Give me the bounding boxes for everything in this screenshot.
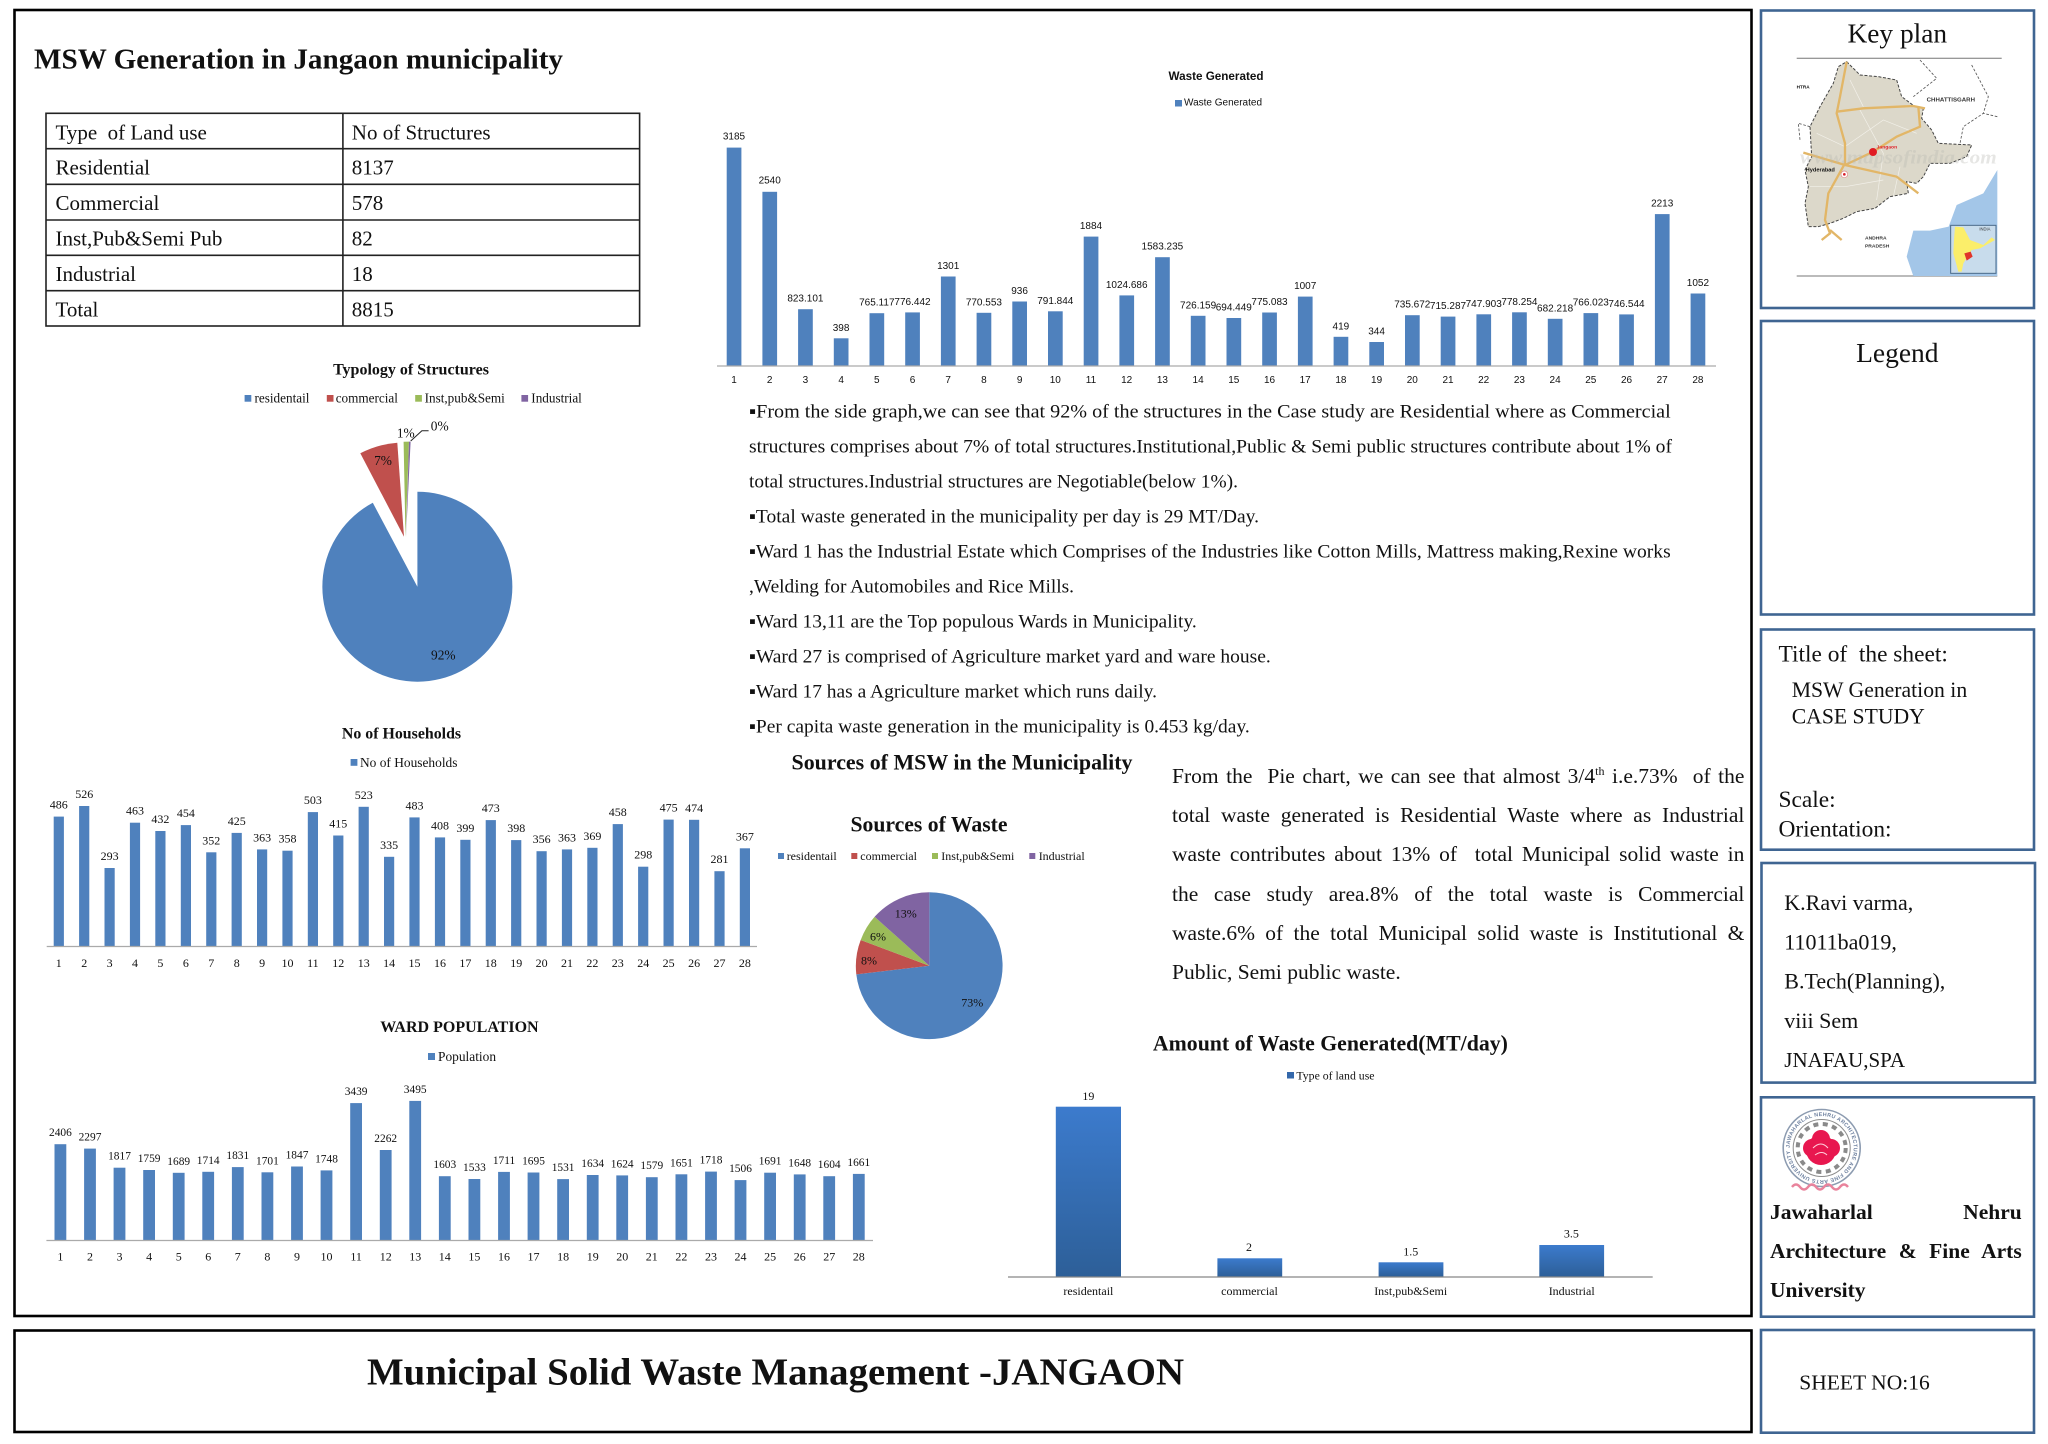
value labels: 1.5	[1403, 1244, 1418, 1258]
legend: commercial	[860, 849, 918, 863]
table: structures by land use: Residential	[56, 156, 150, 180]
panel: title of the sheet: CASE STUDY	[1792, 704, 1925, 728]
text block: university name: University	[1770, 1278, 1866, 1302]
ward axis labels: 21	[646, 1250, 658, 1264]
value labels: 475	[660, 801, 678, 815]
page heading: MSW Generation in Jangaon municipality	[34, 43, 563, 75]
ward axis labels: 8	[981, 375, 987, 386]
ward axis labels: 2	[81, 956, 87, 970]
ward axis labels: 25	[663, 956, 675, 970]
legend: Inst,pub&Semi	[941, 849, 1015, 863]
panel: student details: K.Ravi varma,	[1784, 890, 1913, 915]
ward axis labels: 8	[264, 1250, 270, 1264]
ward axis labels: 27	[1657, 375, 1668, 386]
value labels: 369	[583, 829, 601, 843]
value labels: 770.553	[966, 297, 1002, 308]
chart title: Typology of Structures	[333, 361, 489, 378]
ward axis labels: 28	[739, 956, 751, 970]
value labels: 1711	[493, 1155, 515, 1167]
value labels: 778.254	[1501, 297, 1538, 308]
panel: legend	[1761, 321, 2034, 614]
slice labels: 0%	[431, 419, 449, 434]
ward axis labels: 23	[612, 956, 624, 970]
value labels: 1603	[433, 1159, 456, 1171]
value labels: 1007	[1294, 281, 1317, 292]
value labels: 747.903	[1466, 299, 1502, 310]
ward axis labels: 27	[823, 1250, 835, 1264]
ward axis labels: 16	[1264, 375, 1275, 386]
text block: key findings: ▪Per capita waste generation in the municipality is 0.453 kg/day.	[749, 716, 1250, 737]
value labels: 1701	[256, 1155, 279, 1167]
ward axis labels: 5	[874, 375, 880, 386]
text block: key findings: ,Welding for Automobiles and Rice Mills.	[749, 576, 1074, 597]
ward axis labels: 13	[358, 956, 370, 970]
value labels: 1583.235	[1142, 242, 1184, 253]
value labels: 352	[202, 833, 220, 847]
value labels: 486	[50, 798, 68, 812]
ward axis labels: 14	[439, 1250, 451, 1264]
value labels: 936	[1011, 286, 1028, 297]
value labels: 367	[736, 829, 754, 843]
table: structures by land use: No of Structures	[352, 120, 491, 144]
table: structures by land use: Type of Land use	[56, 120, 207, 144]
ward axis labels: 12	[1121, 375, 1133, 386]
table: structures by land use: 82	[352, 227, 373, 251]
slice labels: 6%	[870, 930, 886, 944]
value labels: 726.159	[1180, 300, 1217, 311]
value labels: 3185	[723, 132, 746, 143]
legend	[245, 391, 582, 406]
table: structures by land use: Commercial	[56, 191, 159, 215]
ward axis labels: 12	[380, 1250, 392, 1264]
value labels: 298	[634, 848, 652, 862]
slice labels: 7%	[374, 453, 392, 468]
ward axis labels: 26	[794, 1250, 806, 1264]
legend: residentail	[254, 391, 310, 406]
panel: title of the sheet: Title of the sheet:	[1778, 642, 1948, 668]
slice labels: 1%	[397, 425, 415, 440]
chart title: Waste Generated	[1168, 69, 1264, 83]
value labels: 419	[1333, 321, 1350, 332]
value labels: 1579	[640, 1160, 663, 1172]
value labels: 2297	[79, 1132, 102, 1144]
ward axis labels: 17	[528, 1250, 540, 1264]
value labels: 408	[431, 818, 449, 832]
category labels: Industrial	[1549, 1284, 1595, 1298]
bar chart: amount of waste generated	[1008, 1030, 1653, 1298]
map of Telangana with Jangaon marked	[1797, 60, 1997, 276]
sheet main title: Municipal Solid Waste Management -JANGAON	[367, 1351, 1184, 1393]
text block: pie chart explanation: the case study area.8% of the total waste is Commercial	[1172, 882, 1744, 906]
ward axis labels: 3	[107, 956, 113, 970]
value labels: 1718	[700, 1155, 723, 1167]
ward axis labels: 22	[675, 1250, 687, 1264]
legend: residentail	[787, 849, 837, 863]
bar chart: ward population	[46, 1019, 873, 1264]
panel: sheet number	[1761, 1330, 2034, 1433]
ward axis labels: 26	[688, 956, 700, 970]
ward axis labels: 9	[259, 956, 265, 970]
value labels	[49, 1084, 870, 1175]
pie chart: sources of waste	[778, 813, 1085, 1039]
ward axis labels: 25	[764, 1250, 776, 1264]
ward axis labels: 24	[734, 1250, 746, 1264]
text block: key findings: ▪Ward 1 has the Industrial Estate which Comprises of the Industries like Cotton Mills, Mattress making,Rexine works	[749, 541, 1671, 562]
ward axis labels: 6	[205, 1250, 211, 1264]
map of Telangana with Jangaon marked: HTRA	[1797, 85, 1810, 90]
legend: commercial	[336, 391, 398, 406]
panel: title of the sheet: Scale:	[1778, 787, 1836, 813]
map of Telangana with Jangaon marked: INDIA	[1979, 226, 1991, 231]
value labels: 746.544	[1608, 299, 1645, 310]
legend: Type of land use	[1296, 1068, 1375, 1082]
value labels	[723, 132, 1709, 338]
ward axis labels: 4	[838, 375, 844, 386]
chart title: WARD POPULATION	[380, 1019, 539, 1036]
ward axis labels: 16	[434, 956, 446, 970]
ward axis labels: 20	[536, 956, 548, 970]
slice labels: 92%	[431, 647, 456, 662]
value labels: 735.672	[1394, 300, 1431, 311]
value labels	[50, 787, 754, 866]
slice labels: 8%	[861, 953, 877, 967]
value labels: 1714	[197, 1155, 220, 1167]
chart title: No of Households	[342, 726, 461, 742]
value labels: 1624	[611, 1158, 634, 1170]
panel: university	[1760, 1096, 2036, 1318]
value labels: 363	[253, 830, 271, 844]
panel: student details: JNAFAU,SPA	[1784, 1048, 1906, 1072]
ward axis labels: 17	[459, 956, 471, 970]
map of Telangana with Jangaon marked: Hyderabad	[1806, 168, 1835, 174]
bottom title frame	[14, 1330, 1752, 1432]
map of Telangana with Jangaon marked: Jangaon	[1877, 144, 1897, 150]
value labels: 765.117	[859, 298, 895, 309]
ward axis labels: 24	[637, 956, 649, 970]
category labels	[1063, 1284, 1595, 1298]
ward axis labels: 2	[767, 375, 773, 386]
ward axis labels: 19	[510, 956, 522, 970]
ward axis labels	[731, 375, 1704, 386]
ward axis labels: 14	[383, 956, 395, 970]
ward axis labels: 1	[731, 375, 737, 386]
ward axis labels: 7	[945, 375, 951, 386]
text block: key findings: ▪From the side graph,we can see that 92% of the structures in the Case study are Residential where as Commercial	[749, 401, 1671, 422]
text block: pie chart explanation	[1172, 764, 1744, 984]
value labels: 682.218	[1537, 303, 1574, 314]
ward axis labels: 23	[1514, 375, 1525, 386]
text block: key findings	[749, 401, 1673, 737]
value labels: 281	[710, 852, 728, 866]
value labels: 1759	[138, 1153, 161, 1165]
value labels: 398	[507, 821, 525, 835]
ward axis labels: 17	[1300, 375, 1311, 386]
ward axis labels: 14	[1193, 375, 1204, 386]
ward axis labels: 11	[1086, 375, 1097, 386]
value labels: 2	[1246, 1240, 1252, 1254]
panel: sheet number: SHEET NO:16	[1799, 1370, 1930, 1394]
value labels: 474	[685, 801, 703, 815]
legend: Waste Generated	[1184, 98, 1262, 108]
ward axis labels: 10	[282, 956, 294, 970]
ward axis labels: 11	[307, 956, 319, 970]
ward axis labels: 12	[332, 956, 344, 970]
ward axis labels: 4	[132, 956, 138, 970]
value labels: 432	[151, 812, 169, 826]
ward axis labels	[57, 1250, 865, 1264]
ward axis labels: 15	[1228, 375, 1240, 386]
text block: key findings: ▪Ward 13,11 are the Top populous Wards in Municipality.	[749, 611, 1197, 632]
ward axis labels: 28	[853, 1250, 865, 1264]
value labels: 399	[456, 821, 474, 835]
legend: Inst,pub&Semi	[425, 391, 505, 406]
ward axis labels: 21	[561, 956, 573, 970]
ward axis labels: 10	[320, 1250, 332, 1264]
slice labels: 73%	[961, 996, 983, 1010]
ward axis labels: 9	[1017, 375, 1023, 386]
text block: key findings: structures comprises about 7% of total structures.Institutional,Public & Semi public structures contribute about 1% of	[749, 436, 1673, 457]
ward axis labels: 4	[146, 1250, 152, 1264]
value labels: 766.023	[1573, 298, 1609, 309]
ward axis labels: 8	[234, 956, 240, 970]
value labels: 1689	[167, 1156, 190, 1168]
value labels: 791.844	[1037, 296, 1074, 307]
chart title: Amount of Waste Generated(MT/day)	[1153, 1030, 1508, 1056]
main content frame	[14, 10, 1752, 1316]
value labels: 363	[558, 830, 576, 844]
table: structures by land use: 18	[352, 262, 373, 286]
text block: key findings: ▪Total waste generated in the municipality per day is 29 MT/Day.	[749, 506, 1259, 527]
value labels: 3.5	[1564, 1226, 1579, 1240]
table: structures by land use: 8815	[352, 297, 394, 321]
value labels: 415	[329, 816, 347, 830]
text block: key findings: total structures.Industrial structures are Negotiable(below 1%).	[749, 471, 1238, 492]
ward axis labels: 16	[498, 1250, 510, 1264]
legend: No of Households	[360, 755, 457, 770]
value labels: 335	[380, 838, 398, 852]
legend: Population	[438, 1049, 496, 1064]
ward axis labels: 15	[408, 956, 420, 970]
ward axis labels: 21	[1442, 375, 1454, 386]
ward axis labels: 13	[409, 1250, 421, 1264]
value labels: 1634	[581, 1158, 604, 1170]
ward axis labels: 22	[586, 956, 598, 970]
value labels: 526	[75, 787, 93, 801]
value labels: 358	[278, 832, 296, 846]
panel: student details: viii Sem	[1784, 1008, 1858, 1033]
ward axis labels: 20	[1407, 375, 1418, 386]
text block: university name	[1770, 1200, 2022, 1302]
value labels: 1831	[226, 1150, 249, 1162]
ward axis labels: 13	[1157, 375, 1168, 386]
bars	[54, 806, 750, 946]
ward axis labels: 18	[557, 1250, 569, 1264]
value labels: 503	[304, 793, 322, 807]
ward axis labels: 15	[468, 1250, 480, 1264]
slice labels: 13%	[895, 907, 917, 921]
ward axis labels: 10	[1050, 375, 1061, 386]
value labels: 1691	[759, 1156, 782, 1168]
value labels: 19	[1082, 1089, 1094, 1103]
value labels: 2540	[759, 175, 781, 186]
bars	[727, 148, 1705, 366]
value labels: 1506	[729, 1163, 752, 1175]
value labels: 1604	[818, 1159, 841, 1171]
legend: Industrial	[531, 391, 582, 406]
text block: pie chart explanation: waste contributes about 13% of total Municipal solid waste in	[1172, 842, 1744, 866]
ward axis labels: 1	[56, 956, 62, 970]
legend	[778, 849, 1085, 863]
value labels: 1695	[522, 1156, 545, 1168]
value labels: 1052	[1687, 278, 1709, 289]
table: structures by land use	[46, 113, 640, 326]
value labels: 823.101	[787, 294, 824, 305]
heading: key plan: Key plan	[1847, 18, 1947, 48]
map of Telangana with Jangaon marked: ANDHRA	[1865, 235, 1887, 241]
map of Telangana with Jangaon marked: www.mapsofindia.com	[1800, 147, 1997, 168]
heading: legend: Legend	[1856, 337, 1939, 368]
value labels: 1847	[286, 1150, 309, 1162]
value labels: 454	[177, 806, 195, 820]
value labels: 1651	[670, 1157, 693, 1169]
value labels: 1661	[847, 1157, 870, 1169]
category labels: Inst,pub&Semi	[1374, 1284, 1448, 1298]
value labels: 523	[355, 788, 373, 802]
slice labels	[374, 419, 456, 662]
ward axis labels: 19	[587, 1250, 599, 1264]
text block: university name: Jawaharlal Nehru	[1770, 1200, 2022, 1224]
panel: title of the sheet	[1761, 630, 2034, 850]
ward axis labels: 25	[1585, 375, 1597, 386]
ward axis labels: 7	[208, 956, 214, 970]
ward axis labels: 1	[57, 1250, 63, 1264]
ward axis labels: 27	[714, 956, 726, 970]
ward axis labels: 3	[116, 1250, 122, 1264]
text block: pie chart explanation: Public, Semi public waste.	[1172, 960, 1401, 984]
value labels: 1533	[463, 1162, 486, 1174]
value labels: 776.442	[894, 297, 931, 308]
value labels: 344	[1368, 326, 1385, 338]
value labels: 3495	[404, 1084, 427, 1096]
panel: title of the sheet: Orientation:	[1778, 816, 1892, 842]
value labels: 2406	[49, 1127, 72, 1139]
legend: Industrial	[1039, 849, 1085, 863]
text block: university name: Architecture & Fine Arts	[1770, 1239, 2022, 1263]
ward axis labels: 5	[157, 956, 163, 970]
panel: student details: B.Tech(Planning),	[1784, 968, 1945, 994]
value labels: 694.449	[1216, 302, 1252, 314]
ward axis labels: 28	[1692, 375, 1704, 386]
bars	[54, 1101, 865, 1240]
ward axis labels: 6	[183, 956, 189, 970]
value labels	[1082, 1089, 1579, 1258]
value labels: 293	[101, 849, 119, 863]
ward axis labels: 7	[235, 1250, 241, 1264]
bars	[1056, 1107, 1604, 1277]
panel: student details: 11011ba019,	[1784, 929, 1897, 954]
ward axis labels: 18	[1335, 375, 1347, 386]
value labels: 398	[833, 323, 850, 334]
value labels: 715.287	[1430, 301, 1467, 312]
category labels: commercial	[1221, 1284, 1278, 1298]
table: structures by land use: Total	[56, 297, 99, 321]
chart title: Sources of Waste	[850, 813, 1008, 837]
text block: pie chart explanation: total waste generated is Residential Waste where as Industrial	[1172, 803, 1744, 827]
ward axis labels: 3	[803, 375, 809, 386]
value labels: 463	[126, 804, 144, 818]
slice labels	[861, 907, 983, 1010]
value labels: 1817	[108, 1151, 131, 1163]
ward axis labels: 19	[1371, 375, 1383, 386]
panel: student details	[1762, 863, 2035, 1083]
category labels: residentail	[1063, 1284, 1114, 1298]
ward axis labels	[56, 956, 751, 970]
map of Telangana with Jangaon marked: PRADESH	[1865, 243, 1890, 249]
value labels: 2262	[374, 1133, 397, 1145]
value labels: 458	[609, 805, 627, 819]
value labels: 483	[406, 798, 424, 812]
table: structures by land use: 8137	[352, 156, 394, 180]
pie slices	[856, 892, 1003, 1039]
value labels: 1648	[788, 1157, 811, 1169]
ward axis labels: 2	[87, 1250, 93, 1264]
text block: key findings: ▪Ward 17 has a Agriculture market which runs daily.	[749, 681, 1157, 702]
value labels: 1024.686	[1106, 280, 1148, 291]
text block: key findings: ▪Ward 27 is comprised of Agriculture market yard and ware house.	[749, 646, 1271, 667]
table: structures by land use: 578	[352, 191, 383, 215]
ward axis labels: 9	[294, 1250, 300, 1264]
value labels: 356	[533, 832, 551, 846]
ward axis labels: 5	[176, 1250, 182, 1264]
ward axis labels: 22	[1478, 375, 1490, 386]
table: structures by land use: Industrial	[56, 262, 136, 286]
pie slices	[322, 431, 512, 682]
text block: pie chart explanation: From the Pie chart, we can see that almost 3/4th i.e.73% of the	[1172, 764, 1744, 788]
value labels: 1531	[552, 1162, 575, 1174]
value labels: 1748	[315, 1153, 338, 1165]
ward axis labels: 26	[1621, 375, 1632, 386]
ward axis labels: 23	[705, 1250, 717, 1264]
panel: title of the sheet: MSW Generation in	[1792, 678, 1967, 702]
value labels: 775.083	[1251, 297, 1288, 308]
value labels: 473	[482, 801, 500, 815]
ward axis labels: 24	[1550, 375, 1561, 386]
table: structures by land use: Inst,Pub&Semi Pub	[56, 227, 222, 251]
ward axis labels: 20	[616, 1250, 628, 1264]
bar chart: waste generated by ward	[717, 69, 1716, 386]
value labels: 425	[228, 814, 246, 828]
map of Telangana with Jangaon marked: CHHATTISGARH	[1927, 97, 1975, 103]
value labels: 3439	[345, 1086, 368, 1098]
value labels: 1301	[937, 261, 960, 272]
icon: university logo: JAWAHARLAL NEHRU ARCHITECTURE AND FINE ARTS UNIVERSITY	[1786, 1112, 1858, 1184]
heading: sources of MSW: Sources of MSW in the Municipality	[792, 750, 1133, 774]
text block: pie chart explanation: waste.6% of the total Municipal solid waste is Institutional &	[1172, 921, 1744, 945]
panel: key plan	[1761, 10, 2034, 308]
bar chart: no of households	[47, 726, 757, 970]
ward axis labels: 18	[485, 956, 497, 970]
value labels: 1884	[1080, 221, 1103, 232]
ward axis labels: 11	[350, 1250, 362, 1264]
value labels: 2213	[1651, 199, 1674, 210]
pie chart: typology of structures	[245, 361, 582, 682]
ward axis labels: 6	[910, 375, 916, 386]
